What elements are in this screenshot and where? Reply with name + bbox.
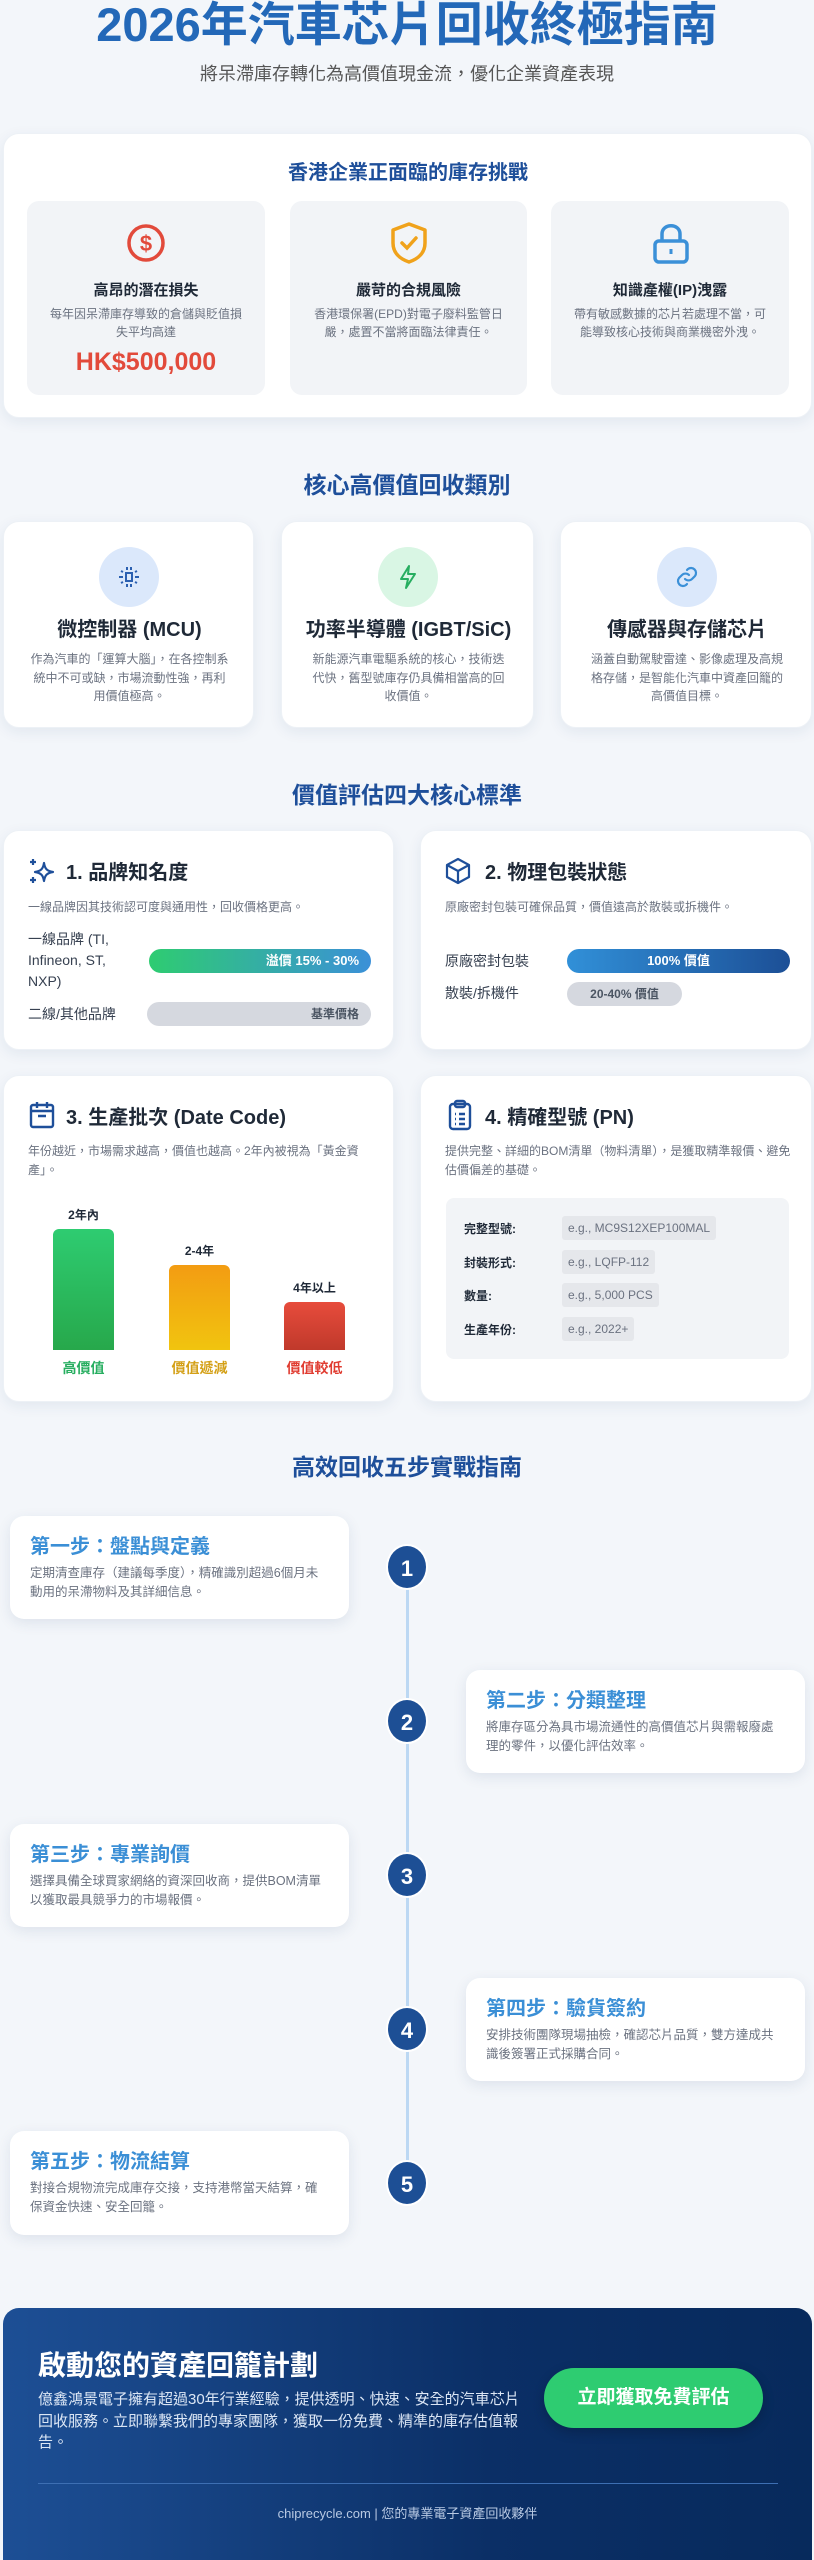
panel: call to action footer: [3, 2308, 812, 2560]
step 5: 對接合規物流完成庫存交接，支持港幣當天結算，確保資金快速、安全回籠。: [30, 2181, 318, 2214]
icon: box: [446, 858, 470, 884]
card: packaging: 原廠密封包裝: [445, 953, 529, 969]
step 1: 第一步：盤點與定義: [30, 1536, 210, 1558]
table: BOM fields: e.g., 5,000 PCS: [568, 1288, 653, 1302]
card: brand: 溢價 15% - 30%: [266, 953, 359, 968]
icon: shield: [391, 222, 427, 264]
card: brand: 基準價格: [311, 1007, 359, 1021]
card: MCU: 作為汽車的「運算大腦」，在各控制系統中不可或缺，市場流動性強，再利用價值極高。: [30, 652, 228, 703]
card: IP leakage: 帶有敏感數據的芯片若處理不當，可能導致核心技術與商業機密外洩。: [574, 307, 766, 339]
card: part number: [420, 1075, 812, 1402]
step 4: 第四步：驗貨簽約: [486, 1998, 646, 2020]
card: IGBT: [281, 521, 534, 728]
table: BOM fields: [446, 1198, 789, 1359]
card: IGBT: 功率半導體 (IGBT/SiC): [306, 619, 511, 641]
step 3: 第三步：專業詢價: [30, 1844, 190, 1866]
card: date code: 年份越近，市場需求越高，價值也越高。2年內被視為「黃金資產」。: [28, 1144, 359, 1177]
card: packaging: 20-40% 價值: [590, 987, 659, 1001]
icon: bolt: [378, 547, 438, 607]
marker 3: 3: [401, 1864, 413, 1889]
card: packaging: [420, 830, 812, 1050]
card: IP leakage: [551, 201, 789, 395]
card: compliance: 香港環保署(EPD)對電子廢料監管日嚴，處置不當將面臨法律責任。: [314, 307, 503, 339]
table: BOM fields: e.g., MC9S12XEP100MAL: [568, 1221, 710, 1235]
step 5: [10, 2131, 349, 2235]
heading: criteria: 價值評估四大核心標準: [292, 782, 522, 808]
table: BOM fields: e.g., LQFP-112: [568, 1255, 649, 1269]
marker 4: [386, 2006, 428, 2052]
icon: chip: [99, 547, 159, 607]
icon: sparkle: [30, 859, 54, 883]
subtitle: 將呆滯庫存轉化為高價值現金流，優化企業資產表現: [200, 64, 614, 84]
marker 1: [386, 1544, 428, 1590]
card: packaging: 2. 物理包裝狀態: [485, 862, 627, 884]
card: compliance: 嚴苛的合規風險: [356, 282, 461, 299]
card: IGBT: 新能源汽車電驅系統的核心，技術迭代快，舊型號庫存仍具備相當高的回收價值。: [312, 652, 504, 703]
card: packaging: 原廠密封包裝可確保品質，價值遠高於散裝或拆機件。: [445, 900, 733, 914]
marker 2: 2: [401, 1710, 413, 1735]
marker 2: [386, 1698, 428, 1744]
card: sensors: 涵蓋自動駕駛雷達、影像處理及高規格存儲，是智能化汽車中資產回籠的高價值目標。: [591, 652, 783, 703]
card: IP leakage: 知識產權(IP)洩露: [613, 282, 727, 299]
card: compliance: [290, 201, 527, 395]
step 3: 選擇具備全球買家網絡的資深回收商，提供BOM清單以獲取最具競爭力的市場報價。: [30, 1874, 321, 1907]
card: brand: [3, 830, 394, 1050]
card: date code: [3, 1075, 394, 1402]
footer text: chiprecycle.com | 您的專業電子資產回收夥伴: [278, 2506, 537, 2521]
row: other brands: 二線/其他品牌: [28, 1006, 116, 1022]
card: sensors: 傳感器與存儲芯片: [607, 619, 767, 641]
table: BOM fields: e.g., 2022+: [568, 1322, 628, 1336]
card: part number: 4. 精確型號 (PN): [485, 1107, 634, 1129]
step 4: [466, 1978, 805, 2081]
icon: lock: [653, 224, 689, 264]
card: part number: 提供完整、詳細的BOM清單（物料清單），是獲取精準報價、避免估價偏差的基礎。: [445, 1144, 790, 1177]
table: BOM fields: 封裝形式:: [464, 1256, 516, 1270]
card: sensors: [560, 521, 812, 728]
bar chart: date code value: 4年以上: [293, 1281, 336, 1295]
bar chart: date code value: 2-4年: [185, 1244, 214, 1258]
step 5: 第五步：物流結算: [30, 2151, 190, 2173]
step 4: 安排技術團隊現場抽檢，確認芯片品質，雙方達成共識後簽署正式採購合同。: [486, 2028, 774, 2061]
heading: challenges: 香港企業正面臨的庫存挑戰: [288, 162, 528, 184]
marker 3: [386, 1852, 428, 1898]
card: packaging: 100% 價值: [647, 953, 710, 968]
icon: clipboard: [448, 1100, 472, 1130]
step 2: 將庫存區分為具市場流通性的高價值芯片與需報廢處理的零件，以優化評估效率。: [486, 1720, 774, 1753]
card: brand: 1. 品牌知名度: [66, 862, 188, 884]
row: tier 1 brands: 一線品牌 (TI, Infineon, ST, NXP): [28, 931, 109, 989]
bar chart: date code value: 2年內: [68, 1208, 99, 1222]
card: date code: 3. 生產批次 (Date Code): [66, 1107, 286, 1129]
icon: dollar: [127, 224, 165, 262]
button: 立即獲取免費評估: [577, 2387, 730, 2408]
step 1: 定期清查庫存（建議每季度），精確識別超過6個月未動用的呆滯物料及其詳細信息。: [30, 1566, 318, 1599]
bar chart: date code value: 高價值: [62, 1360, 104, 1376]
CTA heading: 啟動您的資產回籠計劃: [38, 2350, 318, 2381]
card: potential loss: HK$500,000: [76, 348, 216, 376]
card: MCU: [3, 521, 254, 728]
marker 1: 1: [401, 1556, 413, 1581]
icon: calendar: [30, 1102, 54, 1128]
bar chart: date code value: 價值遞減: [172, 1360, 228, 1376]
timeline line: [406, 1567, 409, 2183]
step 2: [466, 1670, 805, 1773]
CTA text: 億鑫鴻景電子擁有超過30年行業經驗，提供透明、快速、安全的汽車芯片回收服務。立即聯繫我們的專家團隊，獲取一份免費、精準的庫存估值報告。: [38, 2391, 520, 2451]
table: BOM fields: 數量:: [464, 1289, 492, 1303]
button: [544, 2368, 763, 2428]
marker 5: [386, 2160, 428, 2206]
card: brand: 一線品牌因其技術認可度與通用性，回收價格更高。: [28, 900, 304, 914]
step 2: 第二步：分類整理: [486, 1690, 646, 1712]
table: BOM fields: 完整型號:: [464, 1222, 516, 1236]
card: potential loss: 高昂的潛在損失: [93, 282, 198, 299]
card: packaging: 散裝/拆機件: [445, 985, 519, 1001]
marker 5: 5: [401, 2172, 413, 2197]
panel: inventory challenges: [3, 133, 812, 418]
heading: five steps: 高效回收五步實戰指南: [292, 1454, 522, 1480]
marker 4: 4: [401, 2018, 413, 2043]
step 1: [10, 1516, 349, 1619]
bar chart: date code value: [53, 1208, 345, 1376]
bar chart: date code value: 價值較低: [286, 1360, 342, 1376]
heading: categories: 核心高價值回收類別: [304, 472, 510, 498]
card: potential loss: [27, 201, 265, 395]
table: BOM fields: 生產年份:: [464, 1323, 516, 1337]
step 3: [10, 1824, 349, 1927]
icon: link: [657, 547, 717, 607]
card: MCU: 微控制器 (MCU): [57, 619, 202, 641]
card: potential loss: 每年因呆滯庫存導致的倉儲與貶值損失平均高達: [50, 307, 242, 339]
icon: dollar: $: [140, 231, 152, 256]
